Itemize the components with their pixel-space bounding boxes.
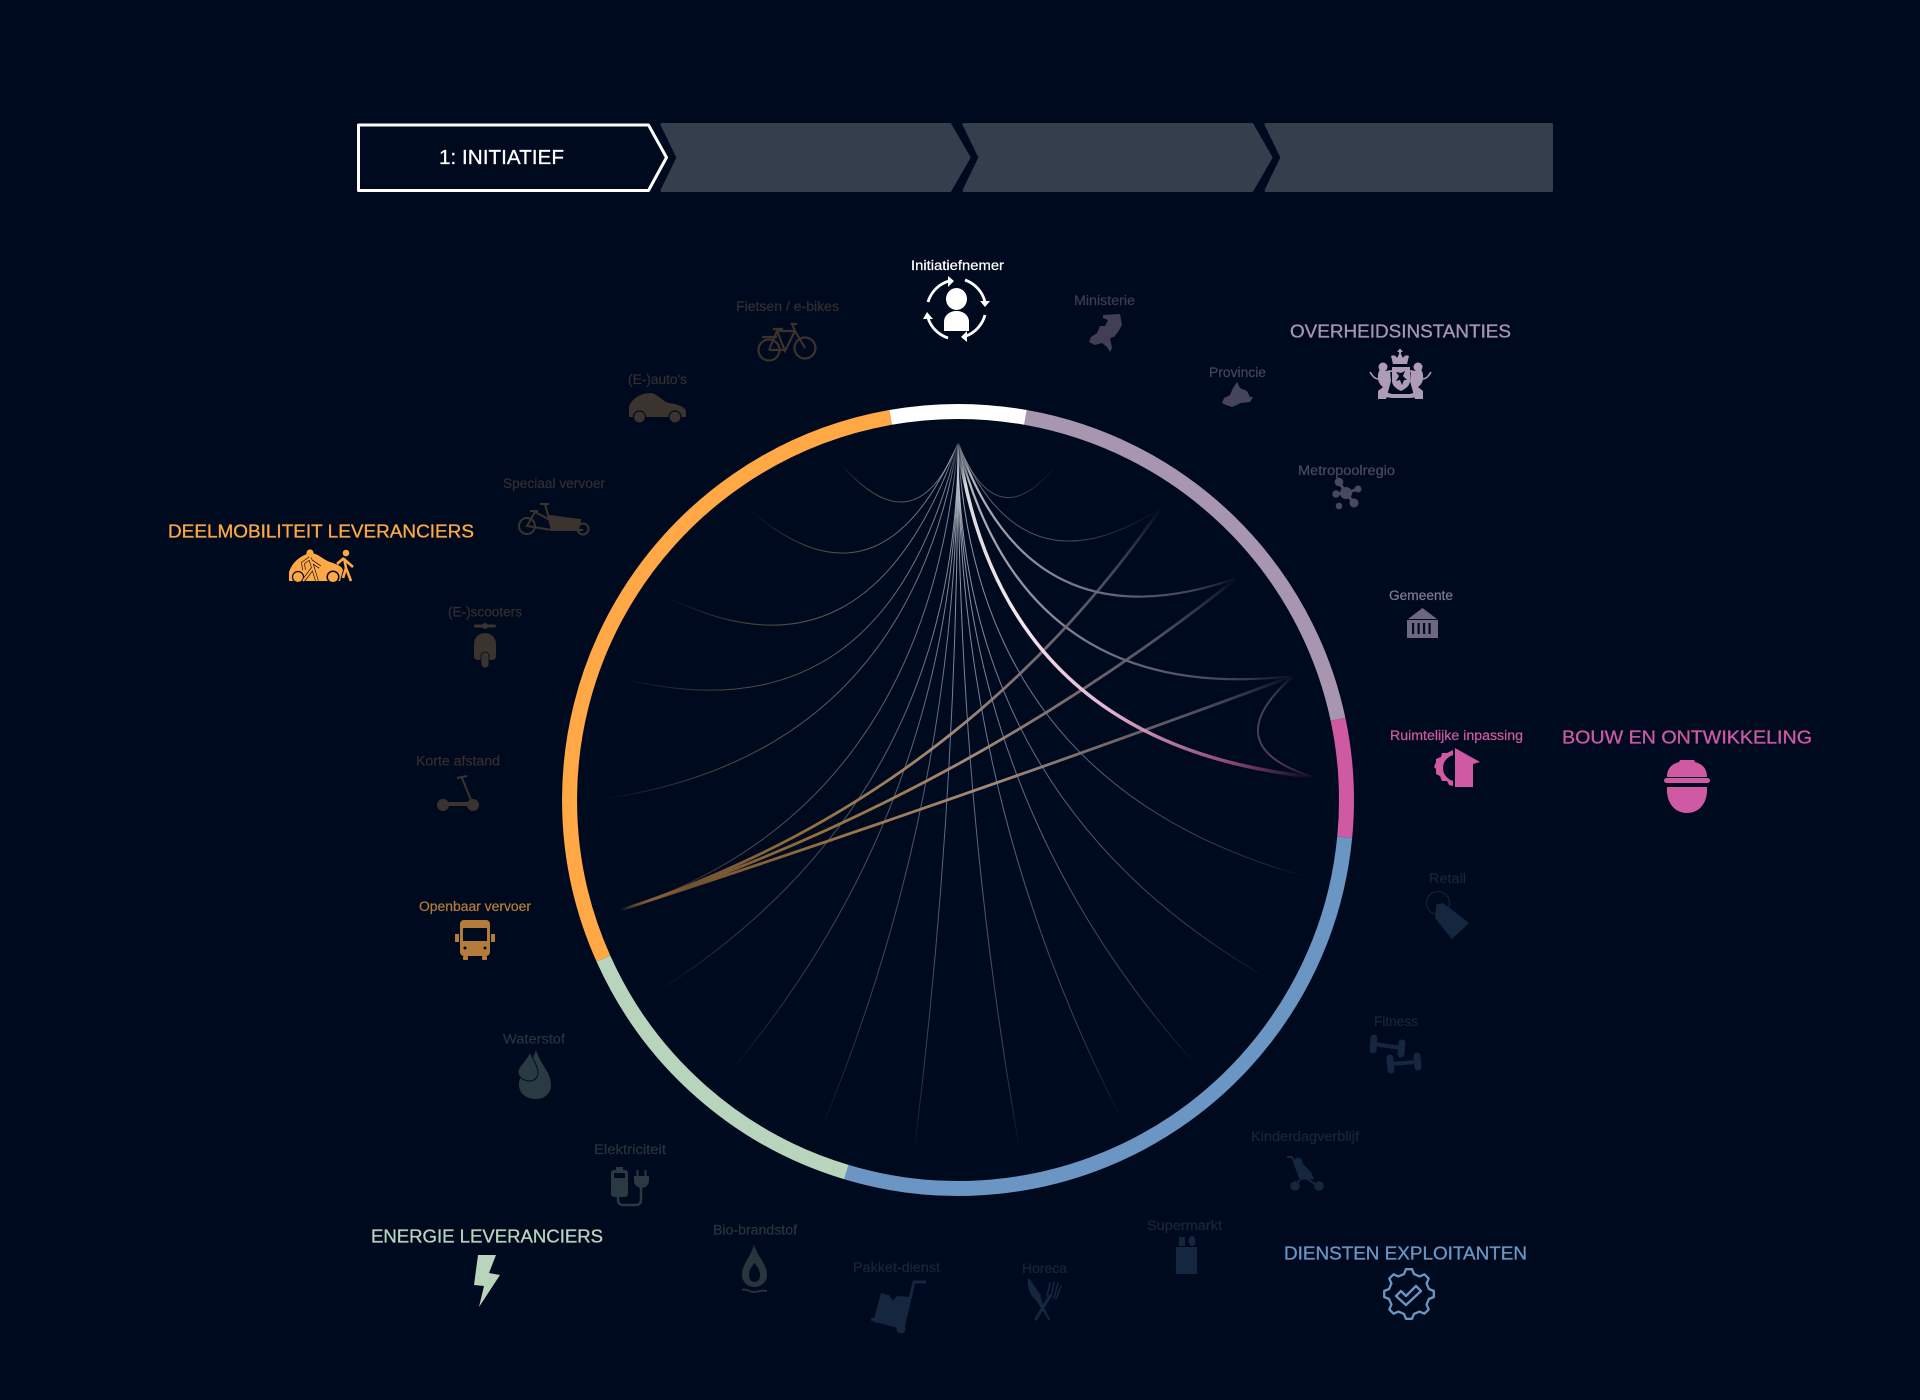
label: Gemeente (1389, 588, 1453, 603)
process steps bar (358, 124, 1552, 190)
icon: flame (742, 1244, 767, 1292)
node: retail (1426, 871, 1468, 938)
label: Fietsen / e-bikes (736, 299, 839, 314)
icon: coat of arms (1370, 349, 1431, 399)
label: DEELMOBILITEIT LEVERANCIERS (168, 522, 474, 542)
label: Openbaar vervoer (419, 899, 532, 914)
group heading: deelmobiliteit leveranciers (168, 522, 474, 583)
label: Metropoolregio (1298, 463, 1395, 478)
node: supermarkt (1147, 1218, 1222, 1274)
icon: grocery bag (1176, 1236, 1197, 1274)
chord ring (570, 411, 1346, 1188)
chord: fietsen (840, 443, 958, 502)
node: pakket-dienst (853, 1260, 940, 1334)
icon: knife and fork (1029, 1280, 1061, 1319)
node: horeca (1022, 1261, 1067, 1319)
chord: openbaar vervoer naar gemeente (621, 676, 1293, 910)
icon: helmet (1664, 760, 1710, 813)
node: gemeente (1389, 588, 1453, 638)
chords between nodes (603, 443, 1313, 1153)
node: ruimtelijke inpassing (1390, 728, 1523, 787)
label: (E-)scooters (448, 604, 522, 620)
chord: metropoolregio (958, 443, 1237, 597)
chord: supermarkt (958, 443, 1121, 1118)
chord: gemeente naar ruimtelijke inpassing (1258, 676, 1313, 777)
icon: netherlands map (1089, 314, 1122, 352)
group heading: overheidsinstanties (1290, 322, 1511, 399)
label: Korte afstand (416, 754, 500, 768)
chord: scooters (620, 443, 958, 690)
ring segment: diensten exploitanten (846, 837, 1345, 1188)
icon: dumbbells (1373, 1038, 1418, 1070)
chord: pakket-dienst (914, 443, 958, 1153)
chord: elektriciteit (730, 443, 958, 1072)
node: fietsen (736, 299, 839, 360)
icon: water drops (518, 1050, 551, 1099)
icon: people pushing car (289, 549, 353, 583)
label: Ruimtelijke inpassing (1390, 728, 1523, 743)
chord: kinderdagverblijf (958, 443, 1197, 1066)
step 2 chevron (662, 124, 969, 190)
label: DIENSTEN EXPLOITANTEN (1284, 1244, 1527, 1264)
icon: price tag (1426, 892, 1468, 938)
step 1: initiatief (358, 125, 666, 190)
chord: ruimtelijke inpassing (958, 443, 1313, 777)
label: Fitness (1374, 1014, 1418, 1029)
node: fitness (1373, 1014, 1418, 1070)
chord: retail (958, 443, 1307, 877)
icon: car (629, 393, 686, 423)
node: scooters (448, 604, 522, 668)
chord: fitness (958, 443, 1267, 978)
chord: gemeente (958, 443, 1293, 679)
label: Provincie (1209, 365, 1266, 380)
chord: openbaar vervoer (621, 443, 958, 910)
chord: openbaar vervoer naar metropoolregio (621, 578, 1237, 910)
node: elektriciteit (594, 1142, 666, 1205)
label: OVERHEIDSINSTANTIES (1290, 322, 1511, 342)
node: waterstof (503, 1032, 565, 1099)
label: Pakket-dienst (853, 1260, 940, 1275)
node: initiatiefnemer (911, 258, 1005, 342)
label: ENERGIE LEVERANCIERS (371, 1226, 603, 1246)
icon: region splat (1334, 479, 1360, 508)
icon: lightning bolt (474, 1255, 500, 1307)
icon: cargo bike (519, 504, 588, 534)
icon: person with cycle arrows (923, 276, 990, 342)
icon: bus (455, 920, 495, 960)
ring segment: bouw en ontwikkeling (1338, 719, 1346, 837)
icon: moped (474, 623, 496, 668)
ring segment: initiatiefnemer (890, 411, 1026, 417)
label: (E-)auto's (628, 372, 687, 387)
step 4 chevron (1266, 124, 1552, 190)
label: Waterstof (503, 1032, 565, 1046)
node: bio-brandstof (713, 1222, 797, 1292)
label: Retail (1429, 871, 1466, 886)
icon: gear and house (1434, 748, 1480, 787)
node: ministerie (1074, 293, 1135, 352)
icon: province map (1222, 382, 1253, 407)
icon: parcel trolley (871, 1282, 926, 1334)
ring segment: energie leveranciers (603, 959, 846, 1172)
chord: openbaar vervoer naar provincie (621, 508, 1161, 910)
label: Horeca (1022, 1261, 1067, 1276)
chord: speciaal vervoer (665, 443, 958, 625)
node: metropoolregio (1298, 463, 1395, 508)
label: Bio-brandstof (713, 1222, 797, 1238)
node: auto's (628, 372, 687, 423)
label: Elektriciteit (594, 1142, 666, 1157)
icon: gear with check (1384, 1269, 1434, 1319)
ring segment: overheidsinstanties (1026, 417, 1338, 719)
label: Initiatiefnemer (911, 258, 1005, 273)
icon: stroller (1287, 1157, 1324, 1191)
chord: provincie (958, 443, 1161, 541)
icon: charger (611, 1167, 649, 1205)
node: provincie (1209, 365, 1266, 407)
node: speciaal vervoer (503, 476, 606, 534)
icon: town hall (1407, 608, 1438, 638)
group heading: diensten exploitanten (1284, 1244, 1527, 1319)
label: Speciaal vervoer (503, 476, 606, 491)
chord: auto's (750, 443, 958, 553)
label: Ministerie (1074, 293, 1135, 308)
ring segment: deelmobiliteit leveranciers (570, 417, 890, 959)
icon: kick scooter (438, 776, 478, 810)
node: kinderdagverblijf (1251, 1129, 1359, 1191)
group heading: energie leveranciers (371, 1226, 603, 1307)
label: Supermarkt (1147, 1218, 1222, 1233)
label: Kinderdagverblijf (1251, 1129, 1359, 1144)
chord: ministerie (958, 443, 1058, 498)
chord: korte afstand (603, 443, 958, 799)
chord: bio-brandstof (821, 443, 958, 1130)
group heading: bouw en ontwikkeling (1562, 728, 1812, 813)
chord: horeca (958, 443, 1020, 1152)
node: openbaar vervoer (419, 899, 532, 960)
step 1: initiatief: 1: INITIATIEF (439, 147, 564, 169)
step 3 chevron (964, 124, 1271, 190)
label: BOUW EN ONTWIKKELING (1562, 728, 1812, 748)
icon: bicycle (758, 324, 816, 360)
node: korte afstand (416, 754, 500, 810)
chord: waterstof (657, 443, 958, 992)
